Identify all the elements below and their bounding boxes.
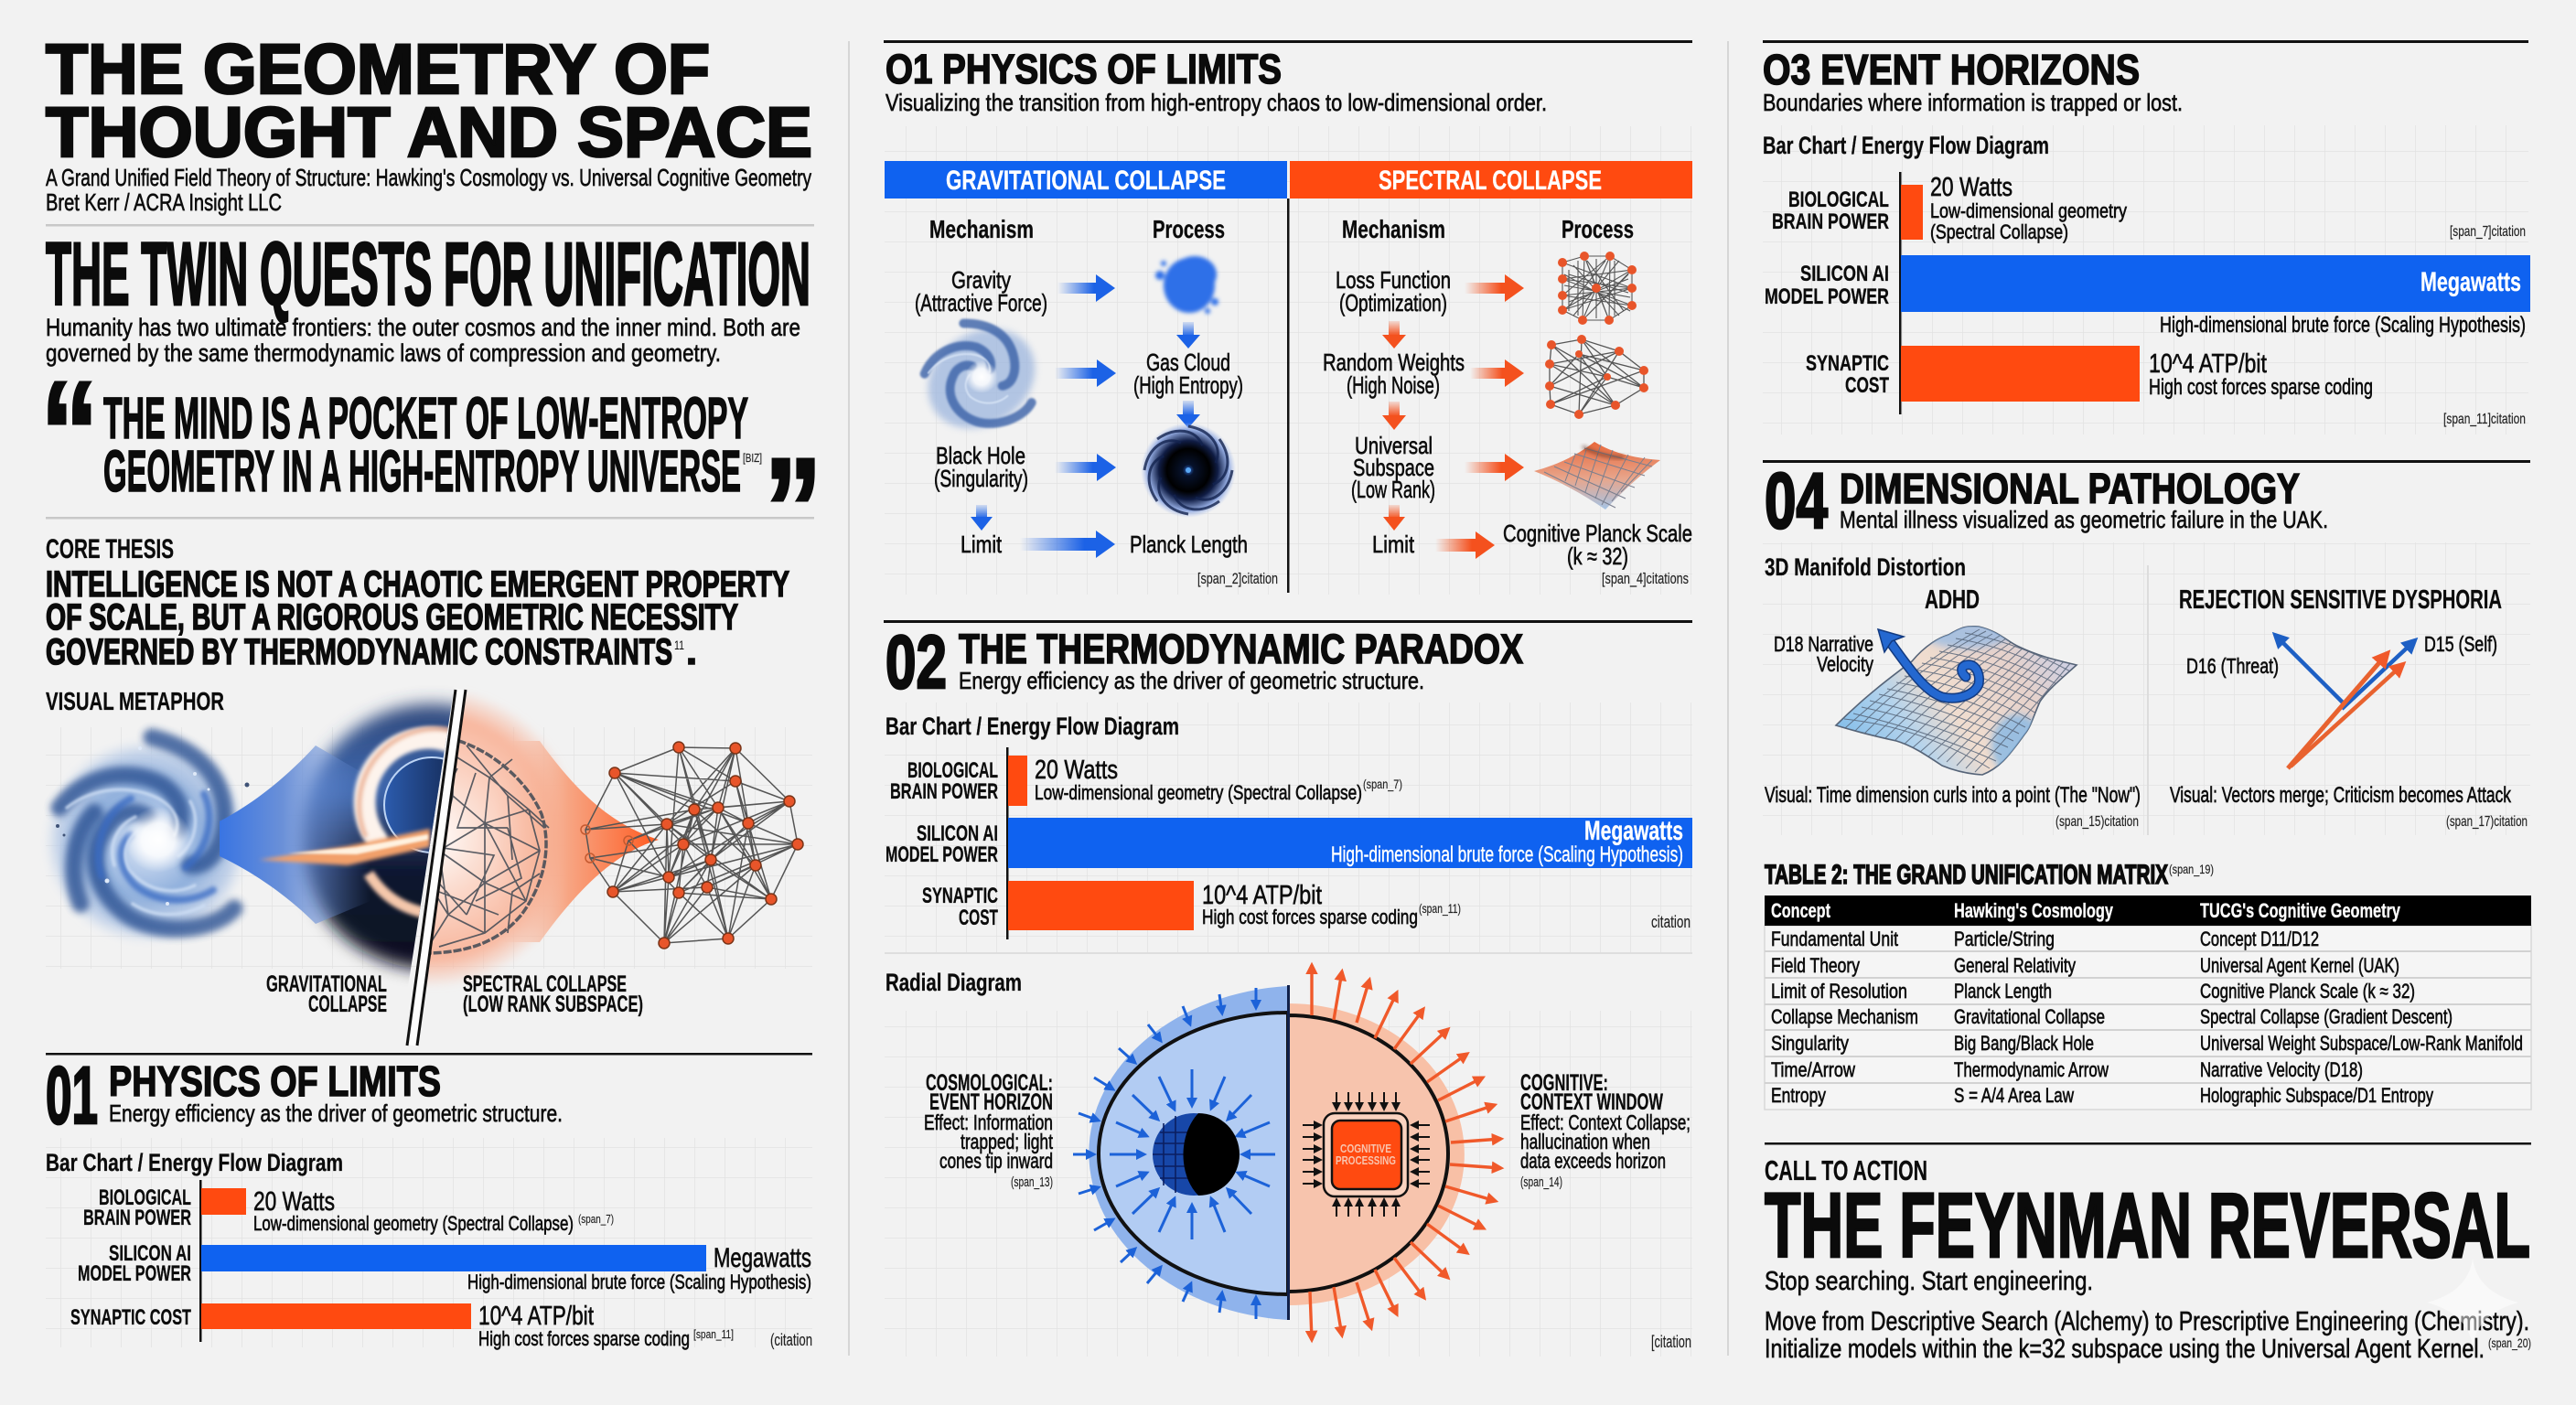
- pull quote: GEOMETRY IN A HIGH-ENTROPY UNIVERSE: [103, 438, 741, 504]
- thesis statement: 11: [674, 638, 684, 652]
- flow: spectral collapse: Mechanism: [1342, 215, 1445, 243]
- node: black hole: Black Hole: [936, 442, 1025, 469]
- icon: sparkle watermark: [2427, 1259, 2518, 1346]
- bar chart: SYNAPTIC COST: [70, 1305, 191, 1330]
- callout: cosmological event horizon: (span_13): [1011, 1174, 1053, 1190]
- node: planck length: Planck Length: [1130, 531, 1248, 558]
- main title: THOUGHT AND SPACE: [46, 93, 812, 172]
- radial diagram: [1073, 965, 1501, 1340]
- bar chart: [1765, 172, 2530, 427]
- flow: gravitational collapse: Process: [1153, 215, 1225, 243]
- bar chart: MODEL POWER: [78, 1261, 191, 1286]
- node: gravity: Gravity: [951, 266, 1011, 294]
- panel: physics of limits (middle column): [884, 40, 1692, 595]
- tagline: Stop searching. Start engineering.: [1765, 1267, 2093, 1296]
- citation: [span_2]citation: [1197, 570, 1278, 587]
- callout: cognitive context window: Effect: Context Collapse;: [1520, 1110, 1690, 1134]
- panel: physics of limits (left column): [46, 1049, 812, 1350]
- node: cognitive planck scale: Cognitive Planck Scale: [1503, 520, 1692, 547]
- node: cognitive planck scale: (k ≈ 32): [1567, 542, 1628, 570]
- panel: dimensional pathology: [1763, 457, 2530, 835]
- section number 02: 02: [886, 619, 947, 704]
- callout: cosmological event horizon: COSMOLOGICAL:: [926, 1070, 1053, 1096]
- table rows: Spectral Collapse (Gradient Descent): [2200, 1005, 2453, 1028]
- table rows: Planck Length: [1954, 980, 2052, 1003]
- bar chart: High cost forces sparse coding: [478, 1327, 690, 1350]
- sub-panel: rejection sensitive dysphoria: D16 (Threat): [2186, 654, 2279, 678]
- bar chart: Megawatts: [2420, 267, 2521, 297]
- pull quote: ”: [764, 427, 822, 591]
- bar chart: 10^4 ATP/bit: [1202, 881, 1322, 910]
- panel: call to action: [1765, 1154, 2531, 1364]
- table header: Hawking's Cosmology: [1954, 899, 2114, 922]
- icon: cognitive processing chip: COGNITIVE: [1340, 1142, 1391, 1155]
- bar chart: SILICON AI: [917, 821, 998, 846]
- bar chart: MODEL POWER: [1765, 284, 1889, 309]
- node: black hole: [934, 442, 1028, 492]
- heading: DIMENSIONAL PATHOLOGY: [1840, 465, 2300, 512]
- sub-panel: ADHD: Velocity: [1817, 652, 1873, 676]
- bar chart: BRAIN POWER: [83, 1206, 191, 1230]
- sub-panel: ADHD: D18 Narrative: [1774, 632, 1873, 656]
- arrow: narrative velocity spiral: [1878, 629, 1979, 698]
- bar chart: [span_7]citation: [2450, 224, 2526, 240]
- callout: cognitive context window: hallucination when: [1520, 1130, 1650, 1153]
- bar chart: [886, 747, 1692, 939]
- bar chart: (span_7): [1363, 777, 1402, 791]
- bar chart: (Spectral Collapse): [1930, 220, 2068, 243]
- callout: cognitive context window: (span_14): [1520, 1174, 1562, 1190]
- bar chart: BIOLOGICAL: [1788, 188, 1889, 212]
- icon: cognitive processing chip: PROCESSING: [1336, 1153, 1396, 1167]
- illustration: black hole: [220, 690, 454, 982]
- node: random weights: Random Weights: [1323, 349, 1465, 376]
- icon: low-rank surface: [1534, 442, 1660, 509]
- node: universal subspace: (Low Rank): [1351, 476, 1435, 503]
- cognitive half: [1288, 965, 1501, 1340]
- chart title: Bar Chart / Energy Flow Diagram: [1763, 132, 2049, 159]
- panel: visual metaphor: [44, 686, 812, 1046]
- caption: gravitational collapse: COLLAPSE: [308, 992, 387, 1017]
- heading: O3 EVENT HORIZONS: [1763, 46, 2140, 93]
- table rows: Concept D11/D12: [2200, 928, 2319, 950]
- bar chart: 20 Watts: [1930, 173, 2012, 202]
- table rows: Collapse Mechanism: [1771, 1005, 1918, 1028]
- bar chart: BRAIN POWER: [890, 779, 998, 804]
- table rows: Field Theory: [1771, 954, 1860, 977]
- pull quote: [BIZ]: [743, 451, 762, 465]
- node: cognitive planck scale: [1503, 520, 1692, 570]
- label: call to action: CALL TO ACTION: [1765, 1154, 1927, 1186]
- arrow: black hole to swirl: [1055, 454, 1116, 481]
- thesis statement: OF SCALE, BUT A RIGOROUS GEOMETRIC NECESSITY: [46, 597, 738, 638]
- section number 04: 04: [1765, 457, 1828, 545]
- bar chart: 10^4 ATP/bit: [478, 1302, 594, 1331]
- flow: spectral collapse: [1323, 215, 1692, 587]
- bar chart: BIOLOGICAL: [907, 758, 998, 783]
- label: 3d manifold distortion: 3D Manifold Distortion: [1765, 553, 1966, 581]
- node: gravity: (Attractive Force): [915, 289, 1047, 316]
- table rows: Singularity: [1771, 1032, 1849, 1055]
- callout: cosmological event horizon: Effect: Information: [924, 1110, 1053, 1134]
- action text: [1765, 1307, 2531, 1364]
- bar chart: Low-dimensional geometry (Spectral Collapse): [253, 1212, 574, 1235]
- label: core thesis: CORE THESIS: [46, 534, 174, 564]
- illustration: galaxy: [44, 737, 249, 944]
- node: universal subspace: Subspace: [1353, 454, 1434, 481]
- subtitle and author: A Grand Unified Field Theory of Structure: Hawking's Cosmology vs. Universal Cognitive Geometry: [46, 164, 811, 191]
- pull quote: [40, 350, 822, 591]
- bar chart: citation: [1651, 913, 1690, 931]
- citation: (span_17)citation: [2446, 814, 2528, 830]
- arrow: down to random weights: [1382, 321, 1406, 349]
- header: spectral collapse: SPECTRAL COLLAPSE: [1379, 166, 1602, 196]
- bar chart: BRAIN POWER: [1772, 209, 1889, 234]
- table header: TUCG's Cognitive Geometry: [2200, 899, 2401, 922]
- sub-panel: ADHD: ADHD: [1925, 585, 1980, 615]
- bar chart: (citation: [770, 1331, 812, 1349]
- intro text: [46, 314, 800, 367]
- divider between cosmos and mind: [407, 690, 466, 1046]
- action text: (span_20): [2488, 1335, 2531, 1350]
- bar chart: [70, 1180, 812, 1350]
- table header: [1765, 896, 2531, 926]
- subheading: Energy efficiency as the driver of geometric structure.: [959, 667, 1424, 694]
- table header: Concept: [1771, 899, 1830, 922]
- arrow: subspace to surface: [1465, 454, 1524, 481]
- text: THE TWIN QUESTS FOR UNIFICATION: [46, 224, 810, 324]
- bar chart: High-dimensional brute force (Scaling Hypothesis): [1331, 842, 1683, 867]
- arrow: weights to network: [1470, 359, 1524, 387]
- caption: spectral collapse: (LOW RANK SUBSPACE): [463, 992, 643, 1017]
- heading: O1 PHYSICS OF LIMITS: [886, 46, 1282, 92]
- caption: spectral collapse: [463, 971, 643, 1017]
- caption: gravitational collapse: GRAVITATIONAL: [266, 971, 387, 997]
- bar chart: SYNAPTIC: [1806, 351, 1889, 376]
- bar chart: SILICON AI: [1800, 262, 1889, 286]
- node: gas cloud: (High Entropy): [1133, 371, 1243, 399]
- bar chart: High-dimensional brute force (Scaling Hypothesis): [467, 1271, 811, 1293]
- table rows: Narrative Velocity (D18): [2200, 1058, 2363, 1081]
- caption: spectral collapse: SPECTRAL COLLAPSE: [463, 971, 627, 997]
- icon: small galaxy: [909, 308, 1054, 449]
- thesis statement: [46, 564, 789, 672]
- flow: gravitational collapse: [909, 215, 1278, 587]
- section number 01: 01: [46, 1049, 98, 1141]
- table rows: Time/Arrow: [1771, 1058, 1855, 1081]
- callout: cosmological event horizon: trapped; light: [961, 1130, 1053, 1153]
- intro text: Humanity has two ultimate frontiers: the outer cosmos and the inner mind. Both are: [46, 314, 800, 341]
- bar chart: Megawatts: [714, 1243, 811, 1273]
- subheading: Visualizing the transition from high-entropy chaos to low-dimensional order.: [886, 89, 1547, 116]
- panel: event horizons: [1763, 40, 2530, 434]
- bar chart: 10^4 ATP/bit: [2149, 349, 2267, 379]
- icon: dense network: [1558, 252, 1637, 325]
- heading: PHYSICS OF LIMITS: [109, 1057, 441, 1105]
- arrow: limit to cognitive planck: [1435, 531, 1495, 559]
- icon: black hole swirl: [1136, 418, 1240, 522]
- icon: cognitive processing chip: [1303, 1092, 1430, 1217]
- node: limit: Limit: [1372, 531, 1415, 558]
- table rows: S = A/4 Area Law: [1954, 1084, 2074, 1107]
- arrow: galaxy to gas cloud: [1055, 359, 1116, 387]
- arrow: down to black hole: [1176, 401, 1200, 428]
- panel: grand unification table: [1765, 860, 2531, 1110]
- bar chart: COST: [959, 906, 998, 930]
- arrow: down to limit: [971, 505, 993, 531]
- thesis statement: INTELLIGENCE IS NOT A CHAOTIC EMERGENT PROPERTY: [46, 564, 789, 605]
- thesis statement: GOVERNED BY THERMODYNAMIC CONSTRAINTS: [46, 632, 672, 672]
- bar chart: 20 Watts: [253, 1187, 335, 1217]
- sub-panel: ADHD: [1765, 585, 2141, 830]
- node: black hole: (Singularity): [934, 465, 1028, 492]
- thesis statement: .: [686, 632, 697, 672]
- icon: black hole with mesh: [1153, 1113, 1240, 1196]
- table title: (span_19): [2169, 862, 2214, 876]
- table rows: Cognitive Planck Scale (k ≈ 32): [2200, 980, 2415, 1003]
- arrow: gravity to gas cloud: [1057, 274, 1115, 302]
- header: gravitational collapse: [885, 161, 1287, 198]
- node: loss function: [1336, 266, 1451, 316]
- panel: thermodynamic paradox: [884, 619, 1692, 1357]
- bar chart: SILICON AI: [109, 1241, 191, 1266]
- bar chart: [span_11]citation: [2443, 412, 2526, 427]
- cosmological half: [1073, 986, 1288, 1320]
- callout: cosmological event horizon: EVENT HORIZON: [929, 1089, 1053, 1115]
- subheading: Boundaries where information is trapped or lost.: [1763, 89, 2183, 116]
- bar chart: BIOLOGICAL: [99, 1185, 191, 1210]
- callout: cosmological event horizon: cones tip inward: [939, 1149, 1053, 1173]
- main title: [46, 30, 812, 172]
- subtitle and author: Bret Kerr / ACRA Insight LLC: [46, 188, 282, 216]
- table rows: Big Bang/Black Hole: [1954, 1032, 2094, 1055]
- chart title: Bar Chart / Energy Flow Diagram: [886, 713, 1179, 740]
- table rows: [1771, 928, 2523, 1107]
- table: [1765, 896, 2531, 1110]
- callout: cognitive context window: COGNITIVE:: [1520, 1070, 1608, 1096]
- bar chart: (span_7): [578, 1212, 614, 1226]
- bar chart: High cost forces sparse coding: [1202, 906, 1418, 928]
- node: gas cloud: Gas Cloud: [1146, 349, 1230, 376]
- callout: cognitive context window: [1520, 1070, 1690, 1190]
- arrow: down to gas cloud: [1176, 322, 1200, 349]
- icon: sparse network: [1545, 335, 1648, 419]
- callout: cognitive context window: data exceeds horizon: [1520, 1149, 1666, 1173]
- panel: twin quests: [40, 224, 822, 591]
- vector diagram: [2275, 635, 2415, 768]
- table rows: Thermodynamic Arrow: [1954, 1058, 2109, 1081]
- node: gas cloud: [1133, 349, 1243, 399]
- header: gravitational collapse: GRAVITATIONAL COLLAPSE: [946, 166, 1226, 196]
- caption: gravitational collapse: [266, 971, 387, 1017]
- table rows: Gravitational Collapse: [1954, 1005, 2105, 1028]
- intro text: governed by the same thermodynamic laws of compression and geometry.: [46, 339, 721, 367]
- table rows: Fundamental Unit: [1771, 928, 1898, 950]
- callout: cosmological event horizon: [924, 1070, 1053, 1190]
- chart title: radial diagram: Radial Diagram: [886, 969, 1022, 996]
- sub-panel: rejection sensitive dysphoria: [2170, 585, 2528, 830]
- bar chart: Low-dimensional geometry: [1930, 199, 2127, 222]
- bar chart: MODEL POWER: [886, 842, 998, 867]
- node: limit: Limit: [961, 531, 1003, 558]
- node: random weights: (High Noise): [1347, 371, 1440, 399]
- illustration: spectral cone and sphere: [426, 693, 659, 986]
- table rows: Limit of Resolution: [1771, 980, 1907, 1003]
- table rows: Particle/String: [1954, 928, 2055, 950]
- flow: gravitational collapse: Mechanism: [929, 215, 1034, 243]
- arrow: down to universal subspace: [1382, 402, 1406, 430]
- bar chart: High cost forces sparse coding: [2149, 375, 2373, 400]
- chart title: Bar Chart / Energy Flow Diagram: [46, 1149, 343, 1176]
- citation: (span_15)citation: [2055, 814, 2139, 830]
- callout: cognitive context window: CONTEXT WINDOW: [1520, 1089, 1663, 1115]
- illustration: distorted manifold: [1836, 623, 2077, 777]
- table title: TABLE 2: THE GRAND UNIFICATION MATRIX: [1765, 860, 2168, 890]
- subheading: Energy efficiency as the driver of geometric structure.: [109, 1099, 563, 1127]
- icon: gas blob: [1155, 256, 1218, 314]
- caption: Visual: Time dimension curls into a point (The "Now"): [1765, 783, 2141, 808]
- main title: THE GEOMETRY OF: [46, 30, 710, 109]
- table rows: General Relativity: [1954, 954, 2076, 977]
- subtitle and author: [46, 164, 811, 216]
- node: loss function: (Optimization): [1339, 289, 1447, 316]
- citation: [span_4]citations: [1602, 570, 1689, 587]
- table rows: Entropy: [1771, 1084, 1826, 1107]
- flow: spectral collapse: Process: [1562, 215, 1634, 243]
- bar chart: 20 Watts: [1035, 756, 1118, 785]
- bar chart: Low-dimensional geometry (Spectral Collapse): [1035, 781, 1362, 804]
- bar chart: [span_11]: [693, 1327, 734, 1341]
- node: universal subspace: Universal: [1355, 432, 1433, 459]
- bar chart: SYNAPTIC: [922, 884, 998, 908]
- node: gravity: [915, 266, 1047, 316]
- node: universal subspace: [1351, 432, 1435, 503]
- arrow: limit to planck length: [1020, 531, 1115, 558]
- node: random weights: [1323, 349, 1465, 399]
- subheading: Mental illness visualized as geometric failure in the UAK.: [1840, 506, 2328, 533]
- pull quote: “: [40, 350, 99, 514]
- label: visual metaphor: VISUAL METAPHOR: [46, 687, 224, 715]
- illustration: neural network: [581, 742, 803, 949]
- bar chart: Megawatts: [1584, 816, 1683, 846]
- bar chart: (span_11): [1419, 901, 1461, 916]
- citation: [citation: [1651, 1333, 1691, 1351]
- sub-panel: rejection sensitive dysphoria: D15 (Self): [2424, 632, 2497, 656]
- pull quote: THE MIND IS A POCKET OF LOW-ENTROPY: [103, 385, 748, 451]
- arrow: loss to network: [1465, 274, 1524, 302]
- panel: core thesis: [46, 534, 789, 672]
- header: spectral collapse: [1290, 161, 1692, 198]
- bar chart: COST: [1845, 373, 1889, 398]
- arrow: down to limit: [1383, 505, 1405, 531]
- table rows: Universal Agent Kernel (UAK): [2200, 954, 2399, 977]
- heading: THE THERMODYNAMIC PARADOX: [959, 626, 1523, 672]
- table rows: Holographic Subspace/D1 Entropy: [2200, 1084, 2433, 1107]
- panel: title block: [46, 30, 812, 216]
- node: loss function: Loss Function: [1336, 266, 1451, 294]
